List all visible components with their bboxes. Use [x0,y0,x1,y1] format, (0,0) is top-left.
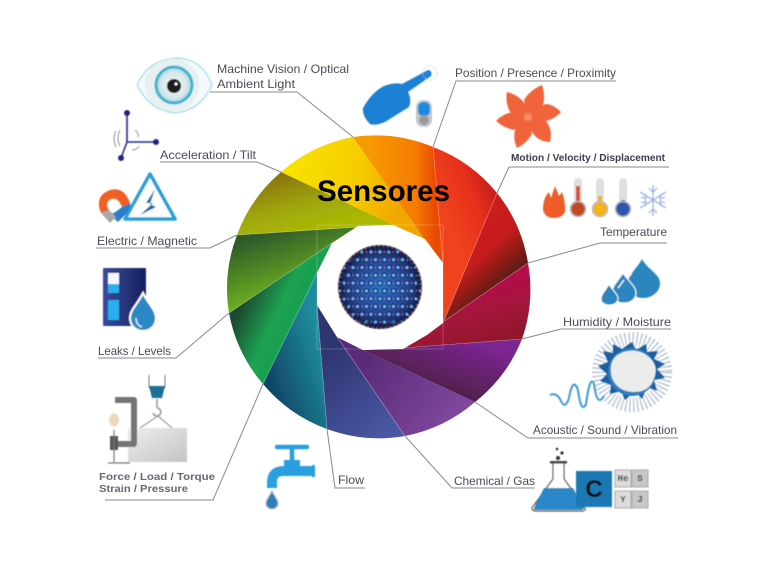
icon: blue thermometer [616,178,630,216]
blade: crimson [403,263,530,348]
icon: yellow thermometer [592,178,608,216]
icon: flame [543,186,565,218]
label: temperature: Temperature [600,225,667,239]
blade: indigo [317,305,405,438]
blade: olive [237,172,393,235]
label: position: Position / Presence / Proximity [455,66,616,80]
label: ambient light: Ambient Light [217,77,296,91]
icon: pointing hand and switch [363,66,437,127]
blade: violet [337,337,475,436]
label: acoustic: Acoustic / Sound / Vibration [533,423,677,437]
label: chemical: Chemical / Gas [454,474,535,488]
label: acceleration: Acceleration / Tilt [160,148,257,162]
icon: flask [532,448,585,511]
icon: sound wave and burst [550,339,665,407]
icon: tap [266,447,315,509]
label: electric: Electric / Magnetic [97,234,197,248]
color wheel [227,135,530,438]
icon: element tiles: He [618,474,628,484]
icon: magnet and high voltage triangle [99,174,175,223]
blade: purple [363,339,522,402]
center white octagon [317,225,443,350]
blade: red orange [433,147,497,323]
label: leaks: Leaks / Levels [98,344,171,358]
blade: yellow [281,137,425,240]
icon: eye [137,58,212,113]
label: strain: Strain / Pressure [99,483,188,495]
icon: element tiles: Y [620,495,626,505]
blade: dark red [427,193,528,333]
icon: red thermometer [570,178,586,216]
title: Sensores [317,175,450,208]
icon: snowflake [640,185,666,216]
icon: barrel and drop [103,268,156,331]
center dotted sphere [338,245,422,329]
icon: element tiles [615,470,648,508]
leader lines [96,81,678,500]
label: humidity: Humidity / Moisture [563,315,671,329]
blade: teal [263,273,327,429]
labels [97,62,677,495]
icon: carbon tile [576,471,612,507]
blade: green [229,243,332,384]
label: machine vision: Machine Vision / Optical [217,62,349,76]
blade: light green [227,227,358,313]
icon: element tiles: S [637,474,643,484]
icon: humidity drops [601,259,660,305]
label: motion: Motion / Velocity / Displacement [511,152,665,164]
label: flow: Flow [338,473,364,487]
label: force: Force / Load / Torque [99,471,215,483]
icon: acceleration axes [114,110,159,161]
icon: element tiles: J [637,495,643,505]
icon: clamp and load [108,375,187,463]
blade: orange [353,135,443,263]
icon: carbon tile: C [585,476,603,503]
icon: fan [496,85,561,148]
